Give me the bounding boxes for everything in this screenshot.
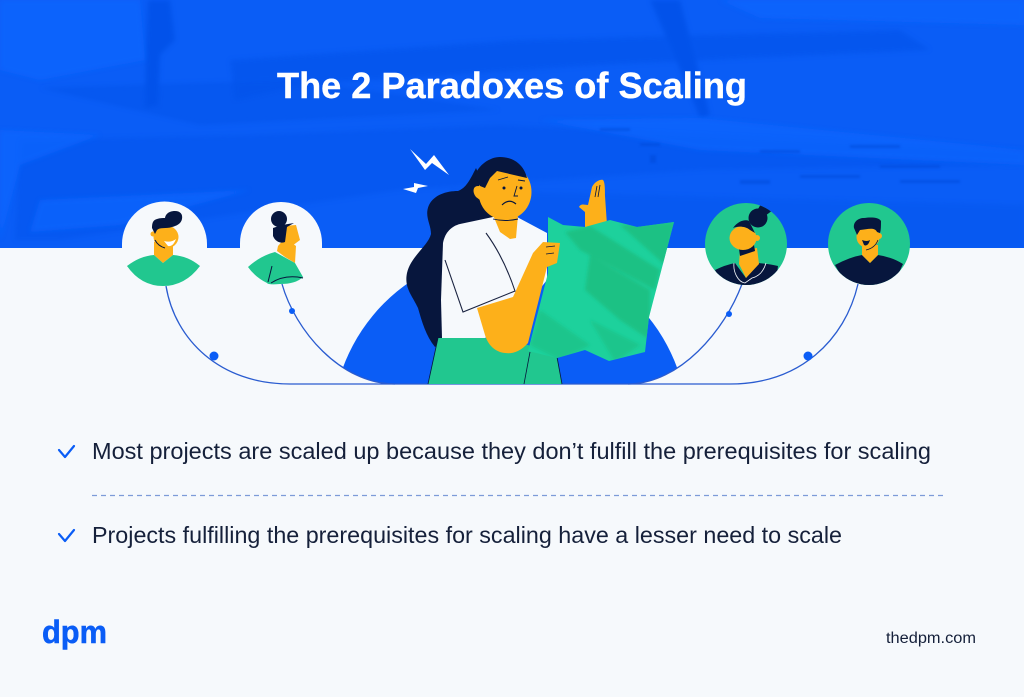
neck xyxy=(493,215,518,239)
woman holding a map xyxy=(403,149,677,384)
face and hair xyxy=(478,164,532,220)
arm xyxy=(477,242,560,353)
blue semicircle behind woman xyxy=(343,266,677,384)
check icon 2 xyxy=(59,530,74,541)
avatar: man with green shirt xyxy=(122,202,207,286)
website: thedpm.com xyxy=(886,630,976,647)
avatar: woman on green circle xyxy=(705,203,787,290)
connector lines xyxy=(166,284,858,384)
blue brush header background xyxy=(0,0,1024,248)
map xyxy=(525,215,677,365)
title: The 2 Paradoxes of Scaling xyxy=(277,65,747,106)
shirt xyxy=(441,217,547,338)
dpm logo: dpm xyxy=(42,614,107,650)
skirt xyxy=(428,338,562,384)
sleeve xyxy=(444,226,515,312)
raised hand xyxy=(579,180,607,232)
avatar: woman side profile xyxy=(240,202,322,284)
list item 1: Most projects are scaled up because they don’t fulfill the prerequisites for scaling xyxy=(92,438,931,464)
hair back xyxy=(406,168,495,347)
lightning bolts xyxy=(410,149,449,175)
list item 2: Projects fulfilling the prerequisites for scaling have a lesser need to scale xyxy=(92,522,842,548)
check icon 1 xyxy=(59,446,74,457)
avatar: man on green circle xyxy=(828,203,910,292)
